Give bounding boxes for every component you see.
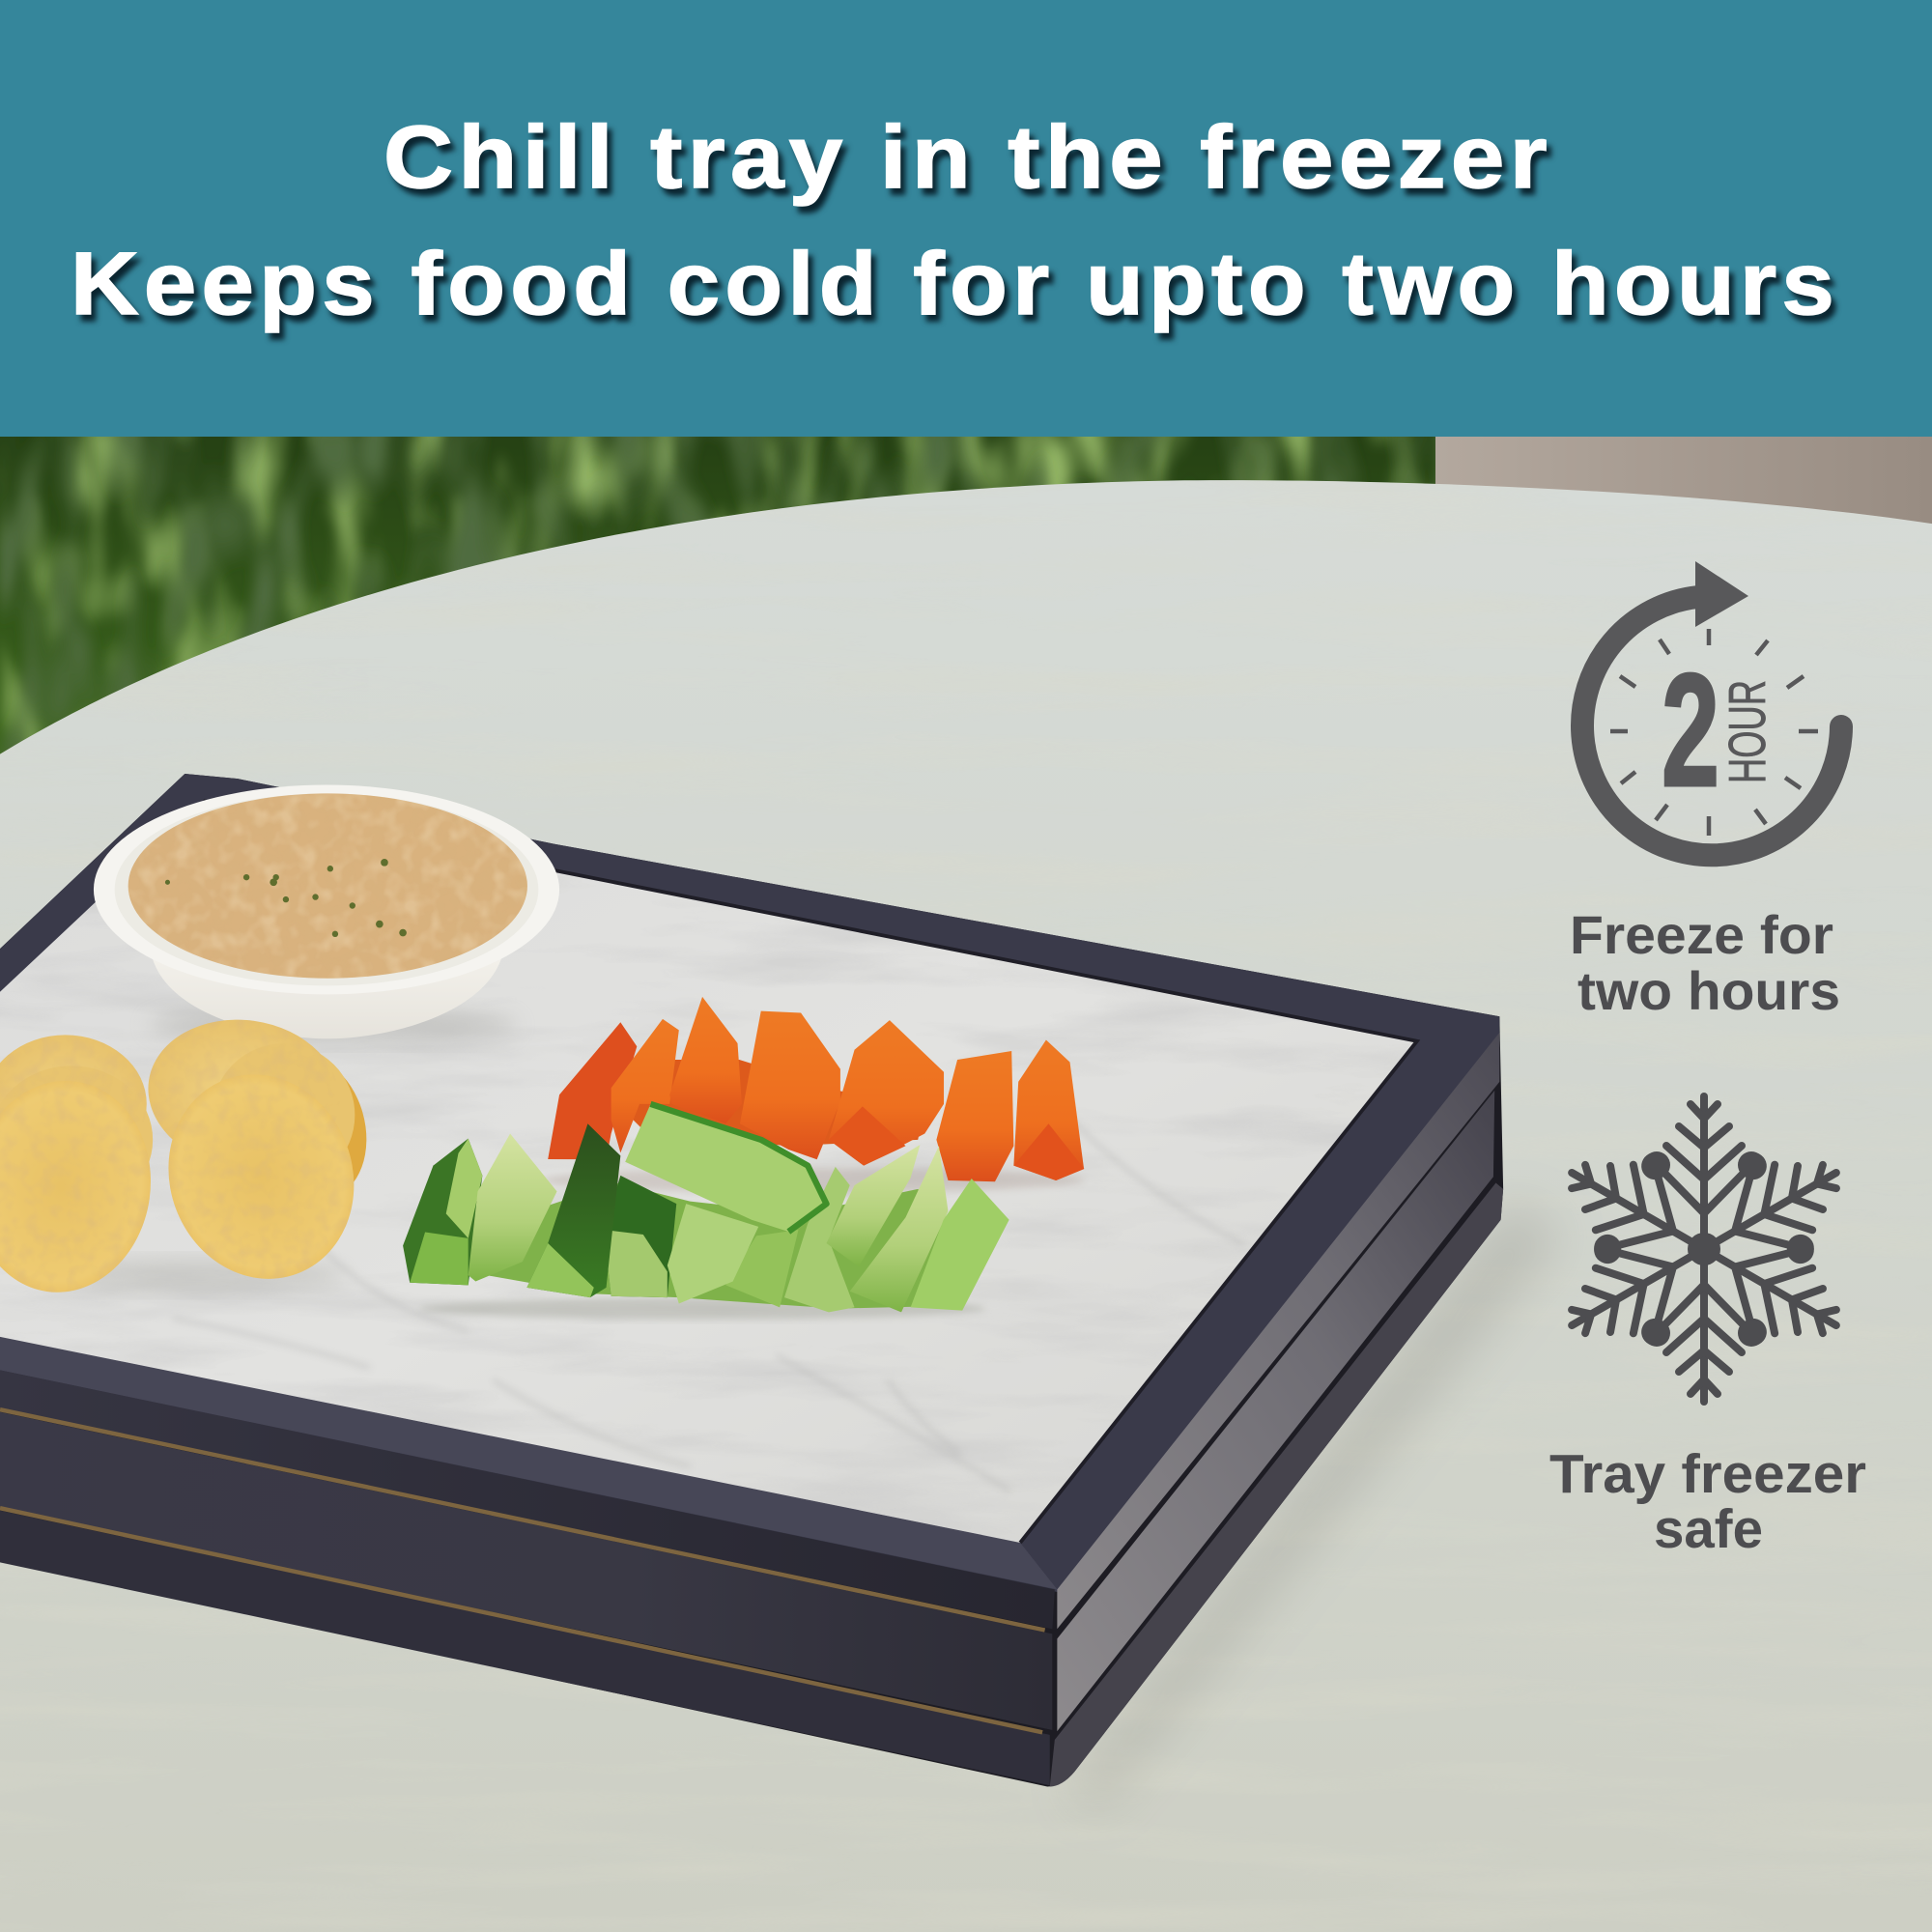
clock ring arc — [1582, 597, 1841, 855]
tray right side middle layer — [1057, 1091, 1494, 1731]
tray dark underlay — [0, 774, 1503, 1786]
background photo: garden, table, tray and food — [0, 419, 1932, 1932]
tray shadow on table — [1072, 1202, 1565, 1811]
tray gold inlay lines — [0, 1409, 1045, 1732]
clock hour label: HOUR — [1719, 680, 1776, 783]
table top — [0, 480, 1932, 1358]
tray front face bottom layer — [0, 1511, 1050, 1785]
carrot sticks — [542, 997, 1084, 1193]
label: tray freezer safe — [1549, 1443, 1866, 1560]
bowl shadow — [148, 1006, 518, 1045]
bowl of hummus — [94, 784, 559, 1045]
tray right side bottom layer — [1050, 1182, 1503, 1786]
title: Chill tray in the freezer — [384, 108, 1552, 207]
top cucumber spear — [625, 1104, 826, 1232]
chip shadows — [49, 1258, 345, 1293]
garden foliage background — [0, 419, 1479, 788]
tray front strip surface — [0, 1336, 1057, 1589]
chip texture — [0, 1010, 382, 1300]
bowl rim — [94, 784, 559, 994]
tray front face top layer — [0, 1370, 1055, 1629]
carrot underlay — [622, 1060, 924, 1146]
title — [71, 108, 1839, 333]
title: Keeps food cold for upto two hours — [71, 235, 1839, 333]
marble tray insert — [0, 788, 1430, 1552]
chair back behind table — [1435, 425, 1932, 542]
bowl body — [151, 949, 504, 1038]
cucumber wedges — [403, 1104, 1009, 1320]
clock arrow head — [1695, 561, 1748, 627]
tray right side top layer — [1057, 1033, 1499, 1629]
clock tick marks — [1610, 629, 1818, 836]
potato chips — [0, 1020, 367, 1294]
header banner — [0, 0, 1932, 437]
icon: two hour clock — [1582, 561, 1841, 855]
label: freeze for two hours: two hours — [1577, 960, 1840, 1021]
label: freeze for two hours: Freeze for — [1570, 904, 1833, 965]
icon: snowflake — [1542, 1096, 1866, 1402]
right chip stack — [138, 1008, 383, 1305]
left chip stack — [0, 1035, 164, 1304]
label: tray freezer safe: Tray freezer — [1549, 1443, 1866, 1505]
label: tray freezer safe: safe — [1654, 1498, 1763, 1560]
hummus — [124, 788, 536, 985]
clock numeral: 2 — [1662, 641, 1719, 820]
tray — [0, 774, 1503, 1786]
label: freeze for two hours — [1570, 904, 1840, 1021]
tray frame top surface — [0, 774, 1499, 1592]
parsley specks — [165, 859, 407, 937]
cucumber underlay — [487, 1182, 961, 1309]
tray front face middle layer — [0, 1412, 1052, 1730]
